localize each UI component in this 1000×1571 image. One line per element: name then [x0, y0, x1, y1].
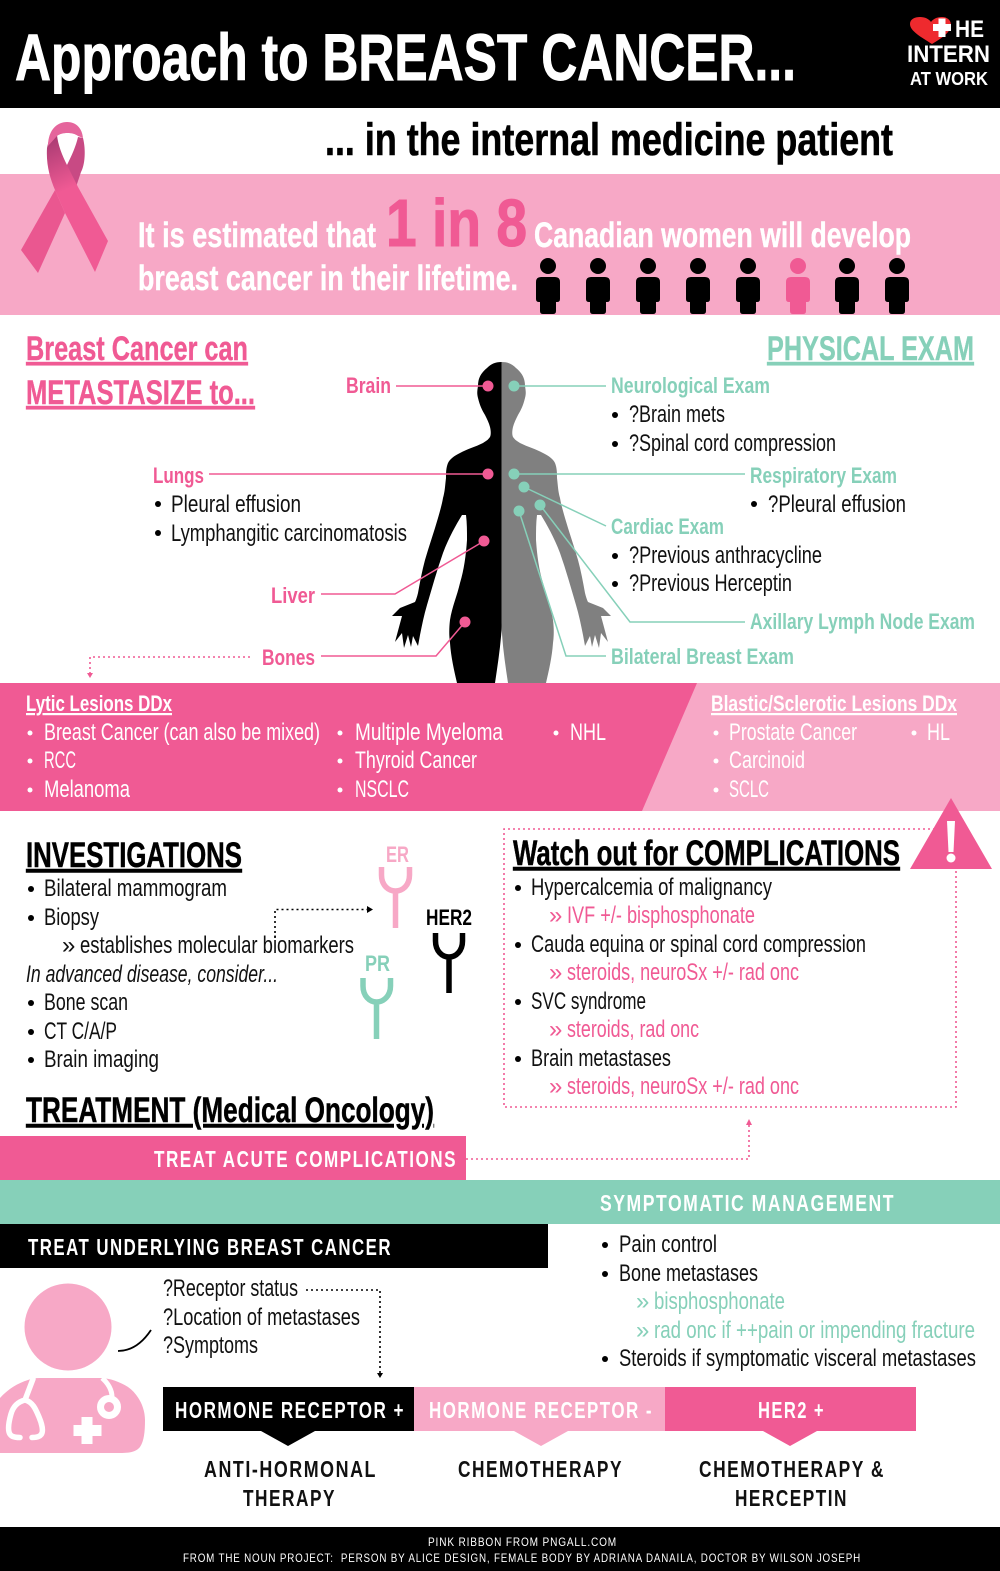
option: hormone receptor negative: HORMONE RECEPTOR - — [429, 1397, 653, 1423]
panel: blastic lesions: Prostate Cancer — [729, 719, 857, 746]
panel: lytic lesions: RCC — [44, 747, 76, 774]
option: hormone receptor negative: CHEMOTHERAPY — [458, 1456, 623, 1482]
label: bones: Bones — [262, 645, 315, 670]
panel: lytic lesions: Breast Cancer (can also be mixed) — [44, 719, 320, 746]
option: hormone receptor negative — [414, 1387, 665, 1482]
label: cardiac exam: ?Previous anthracycline — [629, 542, 822, 569]
label: lungs: Lungs — [153, 463, 204, 488]
investigations list: Bilateral mammogram — [44, 875, 227, 902]
label: cardiac exam — [518, 482, 822, 597]
panel: blastic lesions: SCLC — [729, 776, 769, 803]
heading: metastasize: Breast Cancer can — [26, 330, 248, 368]
bar: symptomatic management — [0, 1180, 1000, 1224]
complications list — [515, 874, 866, 1100]
bar: treat underlying breast cancer — [0, 1224, 548, 1268]
icon: HER2 receptor — [426, 905, 472, 993]
bar: treat acute complications — [0, 1136, 466, 1180]
symptomatic management list: bisphosphonate — [654, 1288, 785, 1315]
label: axillary lymph node exam — [534, 500, 975, 634]
footer credits — [0, 1527, 1000, 1571]
option: hormone receptor positive: THERAPY — [243, 1485, 336, 1511]
symptomatic management list: Pain control — [619, 1231, 717, 1258]
panel: lytic lesions: Thyroid Cancer — [355, 747, 477, 774]
logo: The Intern at Work — [907, 16, 990, 89]
footer credits: PINK RIBBON FROM PNGALL.COM — [428, 1535, 617, 1549]
icon: PR receptor — [363, 951, 390, 1039]
option: hormone receptor positive — [163, 1387, 414, 1511]
complications list: steroids, neuroSx +/- rad onc — [567, 959, 799, 986]
statistic text — [138, 186, 911, 298]
investigations list: » — [62, 932, 75, 959]
label: neurological exam: ?Spinal cord compression — [629, 430, 836, 457]
label: bilateral breast exam — [514, 506, 794, 669]
complications list: » — [549, 1016, 562, 1043]
option: HER2 positive: CHEMOTHERAPY & — [699, 1456, 885, 1482]
label: lungs — [153, 463, 494, 547]
bar: treat underlying breast cancer: TREAT UNDERLYING BREAST CANCER — [28, 1234, 392, 1260]
label: bones — [262, 616, 470, 670]
label: neurological exam: ?Brain mets — [629, 401, 725, 428]
panel: lytic lesions: Multiple Myeloma — [355, 719, 504, 746]
panel: lytic lesions: NSCLC — [355, 776, 409, 803]
bar: treat acute complications: TREAT ACUTE COMPLICATIONS — [154, 1146, 457, 1172]
treatment questions: ?Location of metastases — [163, 1304, 360, 1331]
treatment questions: ?Symptoms — [163, 1332, 258, 1359]
label: respiratory exam — [508, 463, 906, 518]
icon: female body silhouette — [392, 362, 611, 683]
investigations list — [26, 875, 354, 1073]
panel: lytic lesions: NHL — [570, 719, 606, 746]
statistic text: breast cancer in their lifetime. — [138, 259, 518, 298]
label: brain: Brain — [346, 373, 391, 398]
panel: investigations — [26, 836, 472, 1073]
icon: HER2 receptor: HER2 — [426, 905, 472, 930]
physical exam labels — [508, 373, 975, 669]
option: hormone receptor positive: HORMONE RECEPTOR + — [175, 1397, 405, 1423]
panel: complications — [504, 798, 992, 1107]
symptomatic management list — [602, 1231, 976, 1372]
header banner — [0, 0, 1000, 108]
investigations list: Bone scan — [44, 989, 128, 1016]
statistic text: 1 in 8 — [386, 186, 527, 261]
complications list: Hypercalcemia of malignancy — [531, 874, 772, 901]
statistic text: It is estimated that — [138, 216, 376, 255]
icon: doctor — [0, 1284, 151, 1453]
icon: warning triangle — [910, 798, 992, 869]
arrow: bones to lesions — [87, 657, 250, 678]
panel: blastic lesions: HL — [927, 719, 950, 746]
label: neurological exam: Neurological Exam — [611, 373, 770, 398]
symptomatic management list: » — [636, 1317, 649, 1344]
symptomatic management list: Bone metastases — [619, 1260, 758, 1287]
logo: The Intern at Work: INTERN — [907, 41, 990, 68]
complications list: » — [549, 1073, 562, 1100]
option: HER2 positive — [665, 1387, 916, 1511]
arrow: biopsy to biomarkers — [275, 906, 373, 938]
label: cardiac exam: ?Previous Herceptin — [629, 570, 792, 597]
complications list: » — [549, 902, 562, 929]
label: liver: Liver — [271, 583, 315, 608]
arrow: questions to receptor bars — [306, 1290, 383, 1378]
icon: ER receptor: ER — [386, 842, 409, 867]
heading: metastasize: METASTASIZE to... — [26, 374, 255, 412]
complications list: Brain metastases — [531, 1045, 671, 1072]
heading: metastasize — [26, 330, 255, 412]
icon: PR receptor: PR — [365, 951, 390, 976]
complications list: » — [549, 959, 562, 986]
bar: symptomatic management: SYMPTOMATIC MANAGEMENT — [600, 1190, 895, 1216]
complications list: SVC syndrome — [531, 988, 646, 1015]
heading: investigations: INVESTIGATIONS — [26, 836, 242, 875]
investigations list: Biopsy — [44, 904, 99, 931]
treatment questions — [163, 1275, 360, 1359]
heading: treatment: TREATMENT (Medical Oncology) — [26, 1091, 434, 1130]
panel: lesion differential band — [0, 683, 1000, 811]
logo: The Intern at Work: AT WORK — [910, 69, 988, 89]
panel: blastic lesions — [711, 691, 958, 803]
option: HER2 positive: HERCEPTIN — [735, 1485, 848, 1511]
logo: The Intern at Work: HE — [955, 16, 984, 43]
icon: ER receptor — [382, 842, 410, 928]
icon row: eight people, one pink — [536, 258, 909, 314]
label: respiratory exam: ?Pleural effusion — [768, 491, 906, 518]
investigations list: In advanced disease, consider... — [26, 961, 278, 988]
investigations list: establishes molecular biomarkers — [80, 932, 354, 959]
panel: lytic lesions: Lytic Lesions DDx — [26, 691, 173, 716]
option: HER2 positive: HER2 + — [758, 1397, 825, 1423]
icon: pink ribbon — [21, 122, 108, 273]
option: hormone receptor positive: ANTI-HORMONAL — [204, 1456, 377, 1482]
arrow: acute complications to complications box — [466, 1119, 752, 1159]
label: cardiac exam: Cardiac Exam — [611, 514, 724, 539]
label: respiratory exam: Respiratory Exam — [750, 463, 897, 488]
investigations list: Brain imaging — [44, 1046, 159, 1073]
treatment options — [163, 1387, 916, 1511]
footer credits: FROM THE NOUN PROJECT: PERSON BY ALICE DESIGN, FEMALE BODY BY ADRIANA DANAILA, DOCTOR BY WILSON JOSEPH — [183, 1551, 861, 1565]
complications list: IVF +/- bisphosphonate — [567, 902, 755, 929]
panel: blastic lesions: Carcinoid — [729, 747, 805, 774]
label: lungs: Pleural effusion — [171, 491, 301, 518]
complications list: Cauda equina or spinal cord compression — [531, 931, 866, 958]
panel: lytic lesions — [0, 683, 697, 811]
label: bilateral breast exam: Bilateral Breast Exam — [611, 644, 794, 669]
treatment questions: ?Receptor status — [163, 1275, 298, 1302]
complications list: steroids, neuroSx +/- rad onc — [567, 1073, 799, 1100]
investigations list: CT C/A/P — [44, 1018, 117, 1045]
symptomatic management list: » — [636, 1288, 649, 1315]
label: neurological exam — [508, 373, 836, 457]
label: lungs: Lymphangitic carcinomatosis — [171, 520, 407, 547]
statistic banner: 1 in 8 — [0, 174, 1000, 315]
panel: lytic lesions: Melanoma — [44, 776, 130, 803]
label: brain — [346, 373, 494, 398]
complications list: steroids, rad onc — [567, 1016, 699, 1043]
metastasis labels — [87, 373, 494, 678]
label: liver — [271, 536, 490, 608]
speech tick — [118, 1330, 151, 1351]
